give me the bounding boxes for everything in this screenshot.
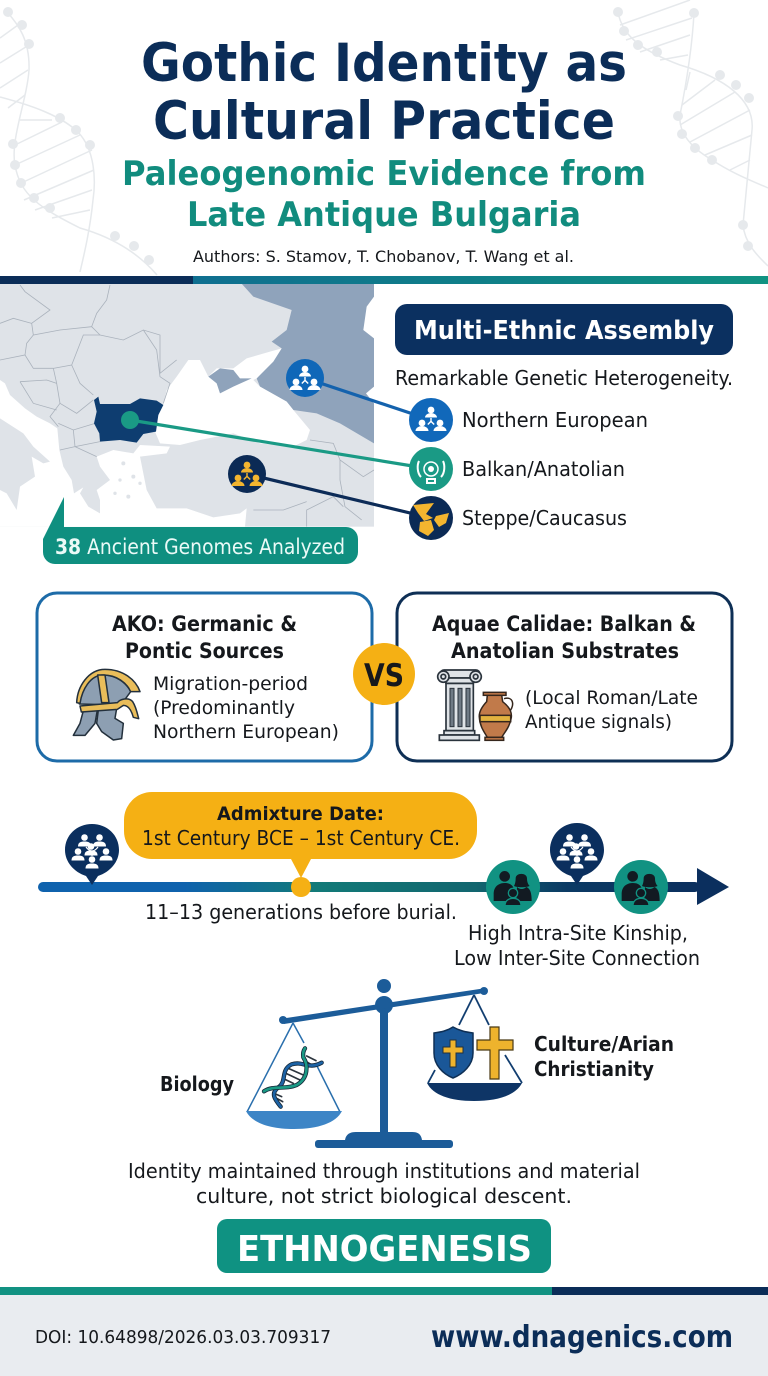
callout: 38 ancient genomes: 38 Ancient Genomes Analyzed bbox=[55, 535, 345, 559]
callout: admixture date: Admixture Date: bbox=[217, 803, 384, 825]
item: Northern European bbox=[409, 398, 648, 442]
title: Gothic Identity as bbox=[141, 33, 627, 94]
light land bbox=[0, 280, 374, 527]
authors: Authors: S. Stamov, T. Chobanov, T. Wang et al. bbox=[193, 247, 574, 266]
left pan bbox=[246, 1023, 342, 1129]
decorative DNA helix: top left bbox=[0, 7, 157, 275]
panel: multi-ethnic assembly bbox=[395, 304, 733, 540]
title: Cultural Practice bbox=[153, 91, 615, 152]
map of the Balkans and Black Sea bbox=[0, 280, 374, 527]
subtitle: Paleogenomic Evidence from bbox=[122, 154, 646, 194]
label: culture: Culture/Arian bbox=[534, 1032, 674, 1056]
heading: Multi-Ethnic Assembly bbox=[414, 316, 714, 346]
icon: vase bbox=[479, 692, 513, 740]
title bbox=[141, 33, 627, 152]
icon: column bbox=[438, 670, 481, 740]
top divider bar bbox=[0, 276, 768, 284]
item: Northern European: Northern European bbox=[462, 408, 648, 432]
item: Balkan/Anatolian bbox=[409, 447, 625, 491]
callout: 38 ancient genomes bbox=[43, 497, 358, 564]
country borders bbox=[0, 285, 374, 527]
text: identity statement: Identity maintained through institutions and material bbox=[128, 1159, 640, 1183]
heading bbox=[112, 612, 297, 663]
Crimea bbox=[208, 368, 252, 393]
description: Remarkable Genetic Heterogeneity. bbox=[395, 366, 733, 390]
pin: left group bbox=[65, 824, 119, 885]
timeline arrow bbox=[38, 868, 729, 905]
callout: admixture date: 1st Century BCE – 1st Century CE. bbox=[142, 826, 460, 850]
pin: right group bbox=[550, 823, 604, 885]
icon: family right bbox=[614, 860, 668, 914]
description: (Local Roman/Late bbox=[525, 687, 698, 709]
dark Russia bbox=[238, 280, 374, 443]
VS badge: VS bbox=[364, 658, 404, 694]
callout: admixture date bbox=[124, 792, 477, 878]
text: generations: 11–13 generations before burial. bbox=[145, 900, 457, 924]
icon: cross bbox=[477, 1027, 513, 1079]
text: kinship: High Intra-Site Kinship, bbox=[468, 921, 688, 945]
description bbox=[525, 687, 698, 733]
scale stand bbox=[279, 979, 488, 1148]
map marker: steppe group bbox=[228, 455, 266, 493]
label: culture bbox=[534, 1032, 674, 1081]
description: Antique signals) bbox=[525, 711, 672, 733]
icon: family left bbox=[486, 860, 540, 914]
Caspian Sea bbox=[363, 297, 374, 403]
VS badge bbox=[353, 643, 415, 705]
heading: Aquae Calidae: Balkan & bbox=[432, 612, 696, 636]
description: Northern European) bbox=[153, 721, 339, 743]
Black Sea and Azov bbox=[155, 348, 310, 447]
DOI: DOI: 10.64898/2026.03.03.709317 bbox=[35, 1327, 331, 1348]
Mediterranean, Adriatic, Aegean bbox=[0, 380, 247, 527]
subtitle: Late Antique Bulgaria bbox=[187, 195, 581, 235]
heading bbox=[395, 304, 733, 355]
balance scale bbox=[246, 979, 522, 1148]
description: Migration-period bbox=[153, 673, 308, 695]
Aegean islands bbox=[113, 461, 142, 499]
Bulgaria highlight bbox=[94, 397, 163, 443]
website: www.dnagenics.com bbox=[431, 1320, 733, 1355]
label: culture: Christianity bbox=[534, 1057, 654, 1081]
footer bbox=[0, 1287, 768, 1376]
panel: Aquae Calidae bbox=[397, 593, 732, 761]
text: identity statement: culture, not strict biological descent. bbox=[196, 1184, 572, 1208]
map marker: northern group bbox=[286, 359, 324, 397]
heading: Anatolian Substrates bbox=[451, 639, 679, 663]
heading: AKO: Germanic & bbox=[112, 612, 297, 636]
item: Steppe/Caucasus: Steppe/Caucasus bbox=[462, 506, 627, 530]
decorative DNA helix: top right bbox=[613, 0, 768, 266]
timeline marker: admixture point bbox=[291, 877, 311, 897]
label: biology: Biology bbox=[160, 1072, 234, 1096]
text: kinship: Low Inter-Site Connection bbox=[454, 946, 700, 970]
ethnogenesis banner: ETHNOGENESIS bbox=[237, 1229, 532, 1270]
description bbox=[153, 673, 339, 743]
subtitle bbox=[122, 154, 646, 235]
item: Steppe/Caucasus bbox=[409, 496, 627, 540]
icon: helmet bbox=[73, 669, 140, 740]
icon: shield bbox=[434, 1027, 473, 1078]
text: identity statement bbox=[128, 1159, 640, 1208]
connector lines bbox=[130, 378, 431, 518]
panel: AKO bbox=[37, 593, 372, 761]
map marker: Bulgaria bbox=[121, 411, 139, 429]
icon: DNA bbox=[264, 1048, 322, 1107]
right pan bbox=[427, 995, 522, 1101]
item: Balkan/Anatolian: Balkan/Anatolian bbox=[462, 457, 625, 481]
description: (Predominantly bbox=[153, 697, 295, 719]
heading: Pontic Sources bbox=[125, 639, 284, 663]
text: kinship bbox=[454, 921, 700, 970]
heading bbox=[432, 612, 696, 663]
